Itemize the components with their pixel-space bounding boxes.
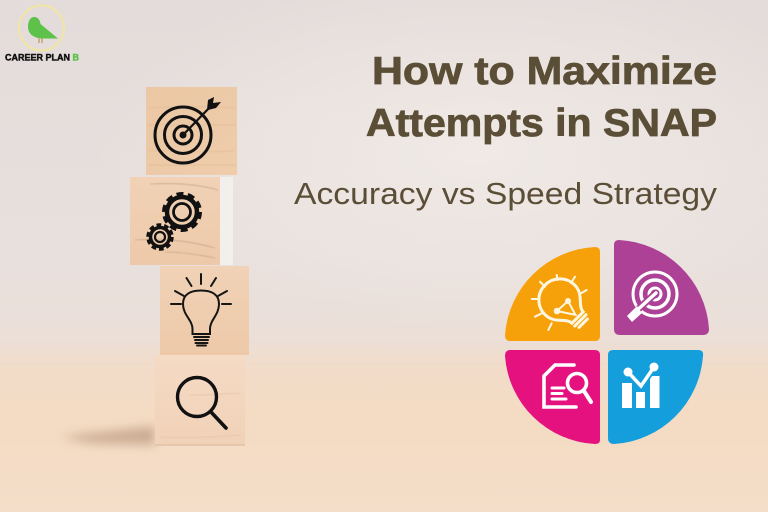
segment: purple target	[614, 240, 709, 335]
subtitle: Accuracy vs Speed Strategy	[294, 176, 718, 211]
icon: large gear	[165, 195, 199, 229]
quadrant pie graphic	[505, 240, 709, 444]
block: target	[146, 87, 237, 175]
logo wordmark: CAREER PLAN B	[5, 52, 79, 62]
segment: pink document search	[505, 350, 600, 444]
segment: orange idea	[505, 247, 600, 341]
title	[366, 50, 717, 145]
icon: magnifying glass	[178, 378, 226, 428]
block: gears	[130, 177, 233, 265]
logo: Career Plan B	[5, 6, 79, 62]
segment: blue chart	[608, 350, 703, 444]
icon: small gear	[148, 226, 172, 248]
icon: light bulb	[171, 274, 231, 346]
title: Attempts in SNAP	[366, 102, 717, 145]
icon: white target	[627, 272, 677, 322]
icon: document with magnifier	[544, 365, 591, 407]
block shadow on table	[60, 426, 155, 445]
block: magnifier	[155, 355, 245, 445]
icon: white bulb	[530, 270, 598, 338]
icon: target and arrow	[155, 97, 221, 163]
icon: bar chart with trend line	[622, 362, 660, 408]
title: How to Maximize	[372, 50, 717, 93]
block: light bulb	[160, 266, 249, 355]
icon: green bird	[28, 17, 58, 43]
